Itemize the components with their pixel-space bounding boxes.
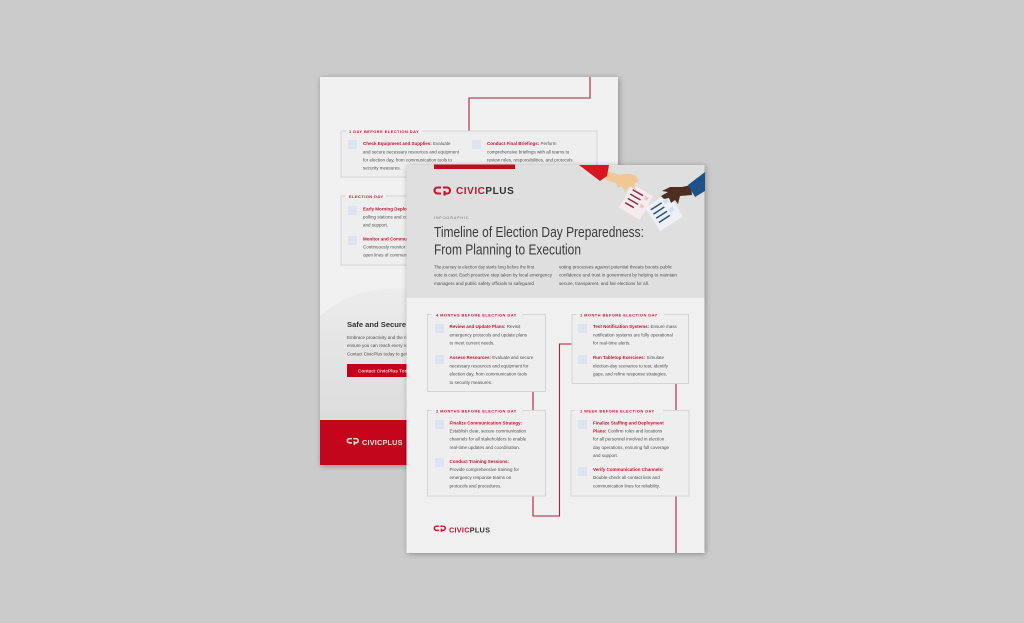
title	[434, 225, 644, 258]
card: 1 month before: 1 MONTH BEFORE ELECTION DAY	[580, 312, 658, 318]
card: 2 months before: emergency response teams on	[450, 475, 512, 480]
title: From Planning to Execution	[434, 242, 581, 258]
closing paragraph: ensure you can reach every resident.	[347, 343, 421, 348]
card: 4 months before: election day, from communication tools	[450, 372, 528, 376]
card: 4 months before: Assess Resources: Evaluate and secure	[450, 355, 534, 360]
front sheet	[406, 164, 705, 553]
card: 4 months before: 4 MONTHS BEFORE ELECTION DAY	[436, 312, 517, 318]
card: 1 day before election day: for election day, from communication tools to	[363, 158, 452, 162]
intro left column: managers and public safety officials to safeguard	[434, 281, 535, 286]
card: 1 day before election day: security measures.	[363, 166, 401, 170]
card: 1 month before: notification systems are fully operational	[593, 332, 673, 338]
card: 1 day before election day: review roles, responsibilities, and protocols.	[487, 158, 574, 162]
card: 4 months before: necessary resources and equipment for	[450, 364, 529, 368]
card: election day: ELECTION DAY	[349, 194, 383, 199]
card: 2 months before: protocols and procedures.	[450, 484, 502, 488]
card: 1 month before: for real-time alerts.	[593, 340, 631, 346]
card: 4 months before: to security measures.	[450, 380, 492, 385]
ballot right	[645, 193, 683, 231]
back sheet	[320, 77, 618, 465]
card: 1 week before: Double-check all contact lists and	[593, 475, 660, 480]
card: 2 months before: Conduct Training Sessions:	[450, 459, 510, 464]
eyebrow: INFOGRAPHIC	[434, 215, 469, 220]
illustration: hands exchanging ballots	[579, 165, 705, 231]
card: 1 day before election day: comprehensive briefings with all teams to	[487, 150, 570, 154]
card: 1 month before: gaps, and refine response strategies.	[593, 372, 667, 376]
card: 4 months before: Review and Update Plans: Revisit	[450, 324, 521, 329]
card: 1 month before: election-day scenarios to test, identify	[593, 364, 669, 368]
card: 1 day before election day: Check Equipment and Supplies: Evaluate	[363, 141, 451, 146]
top red tab	[434, 164, 515, 169]
intro left column: The journey to election day starts long before the first	[434, 264, 535, 270]
intro left column	[434, 264, 553, 286]
card: election day: polling stations and command centers	[363, 214, 439, 220]
card: 2 months before: Finalize Communication Strategy:	[450, 420, 523, 426]
intro right column	[559, 264, 678, 286]
title: Timeline of Election Day Preparedness:	[434, 225, 644, 241]
card: 2 months before: real-time updates and coordination.	[450, 445, 520, 450]
card: 4 months before: emergency protocols and update plans	[450, 332, 528, 338]
card: election day: Continuously monitor events and keep	[363, 244, 440, 250]
card: 4 months before	[428, 312, 546, 392]
red sleeve	[579, 165, 609, 181]
card: 1 week before: Plans: Confirm roles and locations	[593, 428, 663, 434]
card: 1 week before: and support.	[593, 453, 618, 458]
closing heading: Safe and Secure Elections	[347, 320, 442, 329]
intro right column: secure, transparent, and fair elections for all.	[559, 281, 649, 286]
intro right column: voting processes against potential threats boosts public	[559, 264, 673, 270]
card: 2 months before: Establish clear, secure communication	[450, 428, 527, 434]
curved background shape	[320, 288, 618, 420]
card: 1 day before election day: Conduct Final Briefings: Perform	[487, 141, 557, 146]
card: 2 months before	[428, 408, 546, 496]
card: 4 months before: to meet current needs.	[450, 340, 495, 346]
timeline connectors	[533, 344, 676, 553]
closing paragraph	[347, 335, 429, 356]
card: 1 week before: for all personnel involved in election	[593, 436, 665, 442]
card: election day: Early Morning Deployment:	[363, 206, 422, 212]
card: 2 months before: 2 MONTHS BEFORE ELECTION DAY	[436, 408, 517, 414]
header panel	[406, 165, 704, 298]
card: election day: and support.	[363, 222, 388, 228]
card: 1 month before: Run Tabletop Exercises: Simulate	[593, 355, 664, 360]
card: 1 week before: communication lines for reliability.	[593, 484, 660, 488]
light hand	[606, 171, 639, 192]
contact button: Contact CivicPlus Today	[358, 368, 413, 374]
dark hand	[661, 185, 692, 204]
card: 2 months before: channels for all stakeholders to enable	[450, 436, 527, 442]
card: 1 day before election day: and secure necessary resources and equipment	[363, 150, 460, 154]
card: 1 day before election day: 1 DAY BEFORE ELECTION DAY	[349, 129, 419, 134]
footer logo: CIVICPLUS	[362, 438, 403, 447]
timeline connector	[469, 77, 590, 131]
contact button	[347, 364, 427, 377]
card: election day	[341, 194, 597, 265]
card: 1 week before	[571, 408, 689, 496]
bottom logo: CIVICPLUS	[449, 526, 490, 534]
card: 1 week before: Verify Communication Channels:	[593, 467, 664, 472]
intro right column: confidence and trust in government by helping to maintain	[559, 272, 678, 278]
card: 1 day before election day	[341, 129, 597, 177]
card: 1 week before: Finalize Staffing and Deployment	[593, 420, 664, 426]
closing paragraph: Embrace proactivity and the right tools to	[347, 335, 429, 340]
card: 1 month before: Test Notification Systems: Ensure mass	[593, 324, 677, 329]
card: 2 months before: Provide comprehensive training for	[450, 467, 520, 472]
card: election day: Monitor and Communicate:	[363, 236, 422, 242]
logo: CIVICPLUS	[456, 186, 514, 197]
card: 1 week before: day operations, ensuring full coverage	[593, 445, 670, 450]
card: 1 week before: 1 WEEK BEFORE ELECTION DAY	[580, 408, 655, 414]
card: 1 month before	[572, 312, 688, 384]
blue sleeve	[688, 172, 705, 197]
intro left column: vote is cast. Each proactive step taken by local emergency	[434, 272, 553, 278]
red footer band	[320, 420, 618, 465]
card: election day: open lines of communication.	[363, 252, 421, 258]
ballot left	[619, 184, 653, 220]
closing paragraph: Contact CivicPlus today to get started.	[347, 352, 423, 356]
